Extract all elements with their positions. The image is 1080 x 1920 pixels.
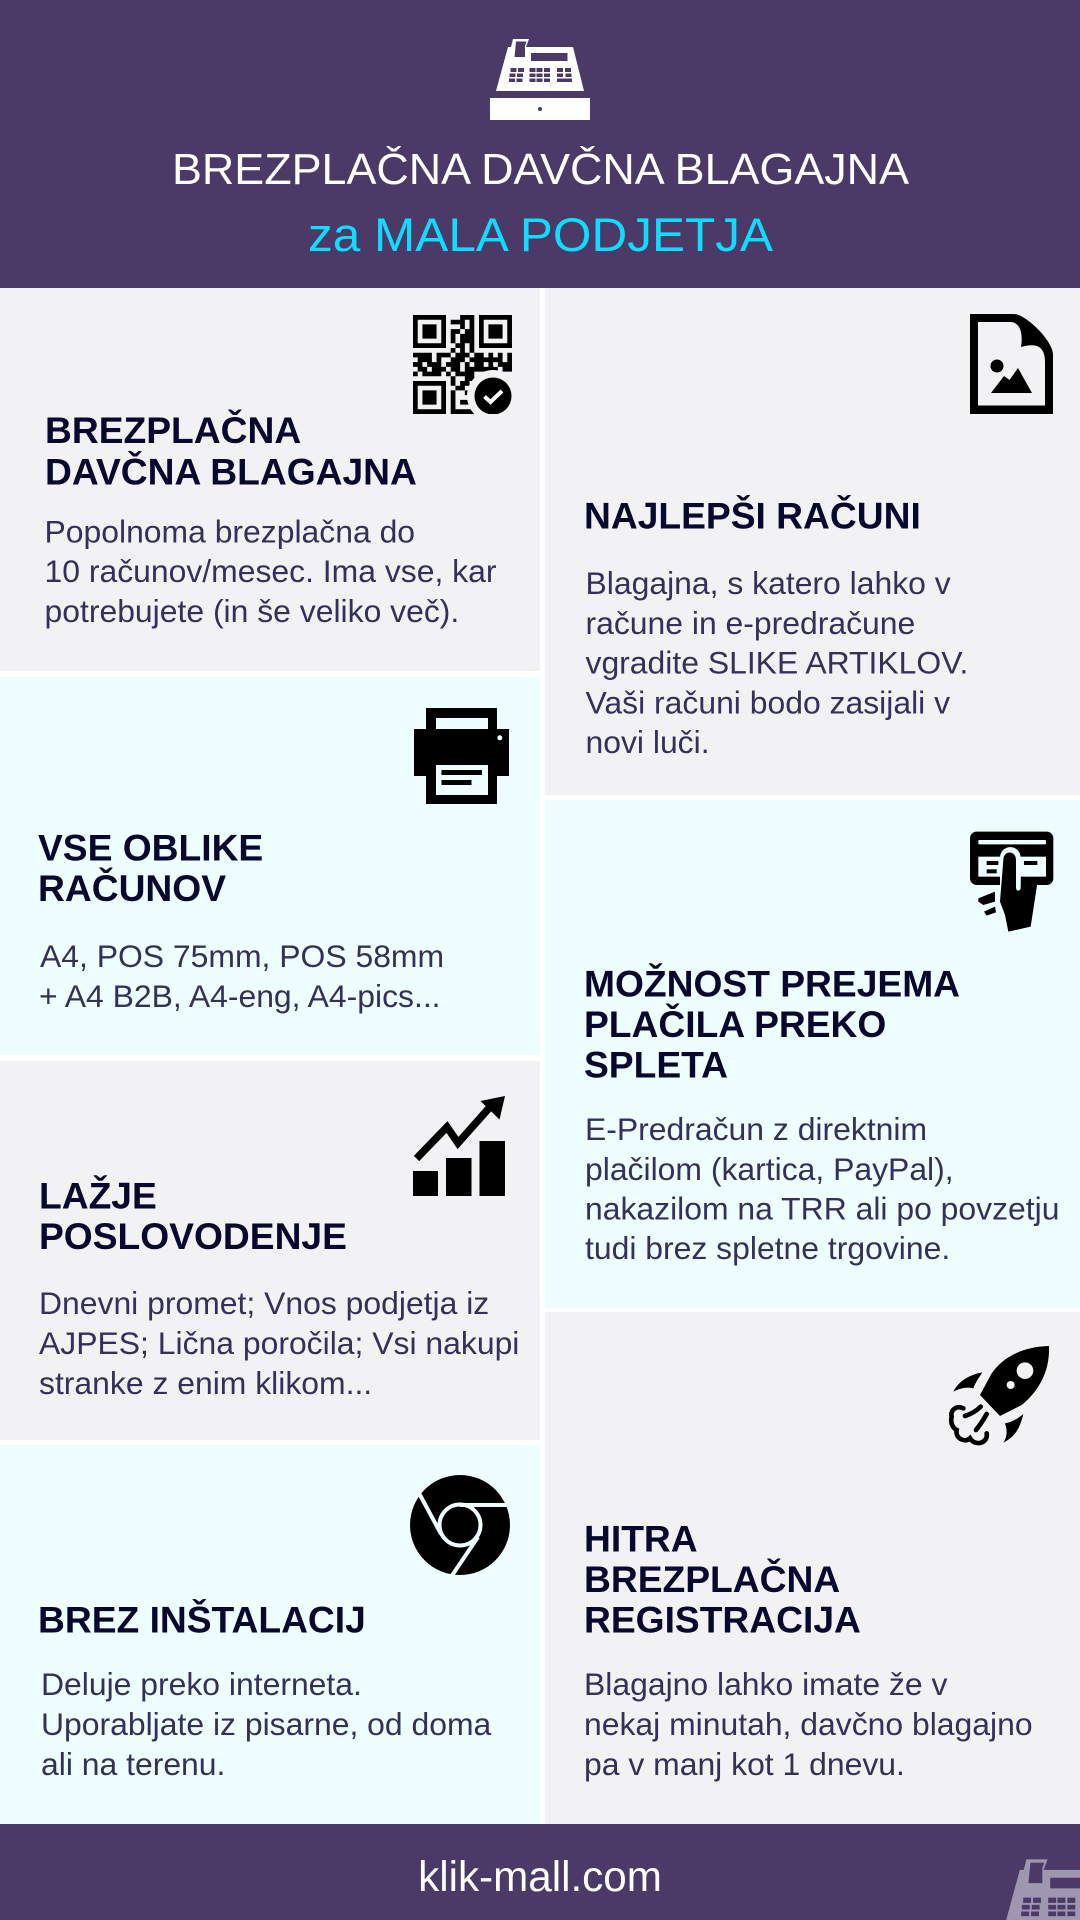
text block [39,938,444,1014]
heading: POSLOVODENJE [39,1215,347,1257]
icon: growth chart [413,1096,505,1196]
icon: hand on credit card [970,832,1053,932]
text block: račune in e-predračune [586,605,915,641]
title line 1: BREZPLAČNA DAVČNA BLAGAJNA [172,144,910,194]
text block: E-Predračun z direktnim [585,1111,927,1147]
heading [45,409,417,492]
text block: pa v manj kot 1 dnevu. [584,1746,905,1782]
heading: PLAČILA PREKO [584,1003,886,1045]
heading: NAJLEPŠI RAČUNI [584,494,921,536]
text block: Uporabljate iz pisarne, od doma [41,1706,492,1742]
text block: A4, POS 75mm, POS 58mm [40,938,444,974]
text block: + A4 B2B, A4-eng, A4-pics... [39,978,441,1014]
heading: SPLETA [584,1044,728,1086]
text block: potrebujete (in še veliko več). [44,593,459,629]
text block [584,1666,1033,1782]
heading [39,1174,347,1257]
text block: Deluje preko interneta. [41,1666,362,1702]
text block: Blagajno lahko imate že v [584,1666,947,1702]
header banner [0,0,1080,288]
heading: HITRA [584,1518,698,1560]
text block [39,1285,519,1401]
text block: vgradite SLIKE ARTIKLOV. [586,644,968,680]
heading: DAVČNA BLAGAJNA [45,450,417,492]
footer bar [0,1824,1080,1920]
heading: RAČUNOV [38,867,226,909]
text block: 10 računov/mesec. Ima vse, kar [44,553,497,589]
panel: lažje poslovodenje [0,1061,540,1440]
text block: nakazilom na TRR ali po povzetju [585,1190,1059,1226]
text block [44,514,497,629]
panel: brez inštalacij [0,1445,540,1824]
icon: cash register [490,39,590,120]
heading: BREZ INŠTALACIJ [38,1598,366,1640]
text block [585,1111,1059,1266]
text block: tudi brez spletne trgovine. [585,1230,950,1266]
icon: chrome logo [410,1475,512,1577]
panel: hitra registracija [545,1312,1080,1824]
heading: BREZPLAČNA [584,1558,840,1600]
icon: printer [414,708,509,804]
text block: nekaj minutah, davčno blagajno [584,1706,1033,1742]
heading: REGISTRACIJA [584,1598,861,1640]
heading [584,1518,861,1640]
panel: najlepši računi [545,288,1080,795]
text block: stranke z enim klikom... [39,1365,372,1401]
heading [38,826,263,909]
panel: vse oblike računov [0,677,540,1055]
text block: AJPES; Lična poročila; Vsi nakupi [39,1325,519,1361]
icon: image document [970,314,1053,414]
text block [41,1666,492,1782]
icon: QR code with check [413,315,519,422]
text block: Dnevni promet; Vnos podjetja iz [39,1285,489,1321]
text block: Blagajna, s katero lahko v [586,565,951,601]
panel: brezplačna davčna blagajna [0,288,540,671]
heading: VSE OBLIKE [38,826,263,868]
heading: BREZPLAČNA [45,409,301,451]
title line 2: za MALA PODJETJA [308,208,774,261]
text block: Popolnoma brezplačna do [44,514,415,550]
text block: novi luči. [586,724,710,760]
text block: Vaši računi bodo zasijali v [586,684,950,720]
heading: MOŽNOST PREJEMA [584,962,960,1004]
icon: rocket [951,1346,1049,1443]
text block: ali na terenu. [41,1746,225,1782]
icon: faded cash register [1004,1859,1080,1920]
text block [586,565,968,760]
text block: plačilom (kartica, PayPal), [585,1151,954,1187]
panel: možnost prejema plačila [545,800,1080,1308]
website address: klik-mall.com [418,1853,662,1900]
heading: LAŽJE [39,1174,157,1216]
heading [584,962,960,1086]
